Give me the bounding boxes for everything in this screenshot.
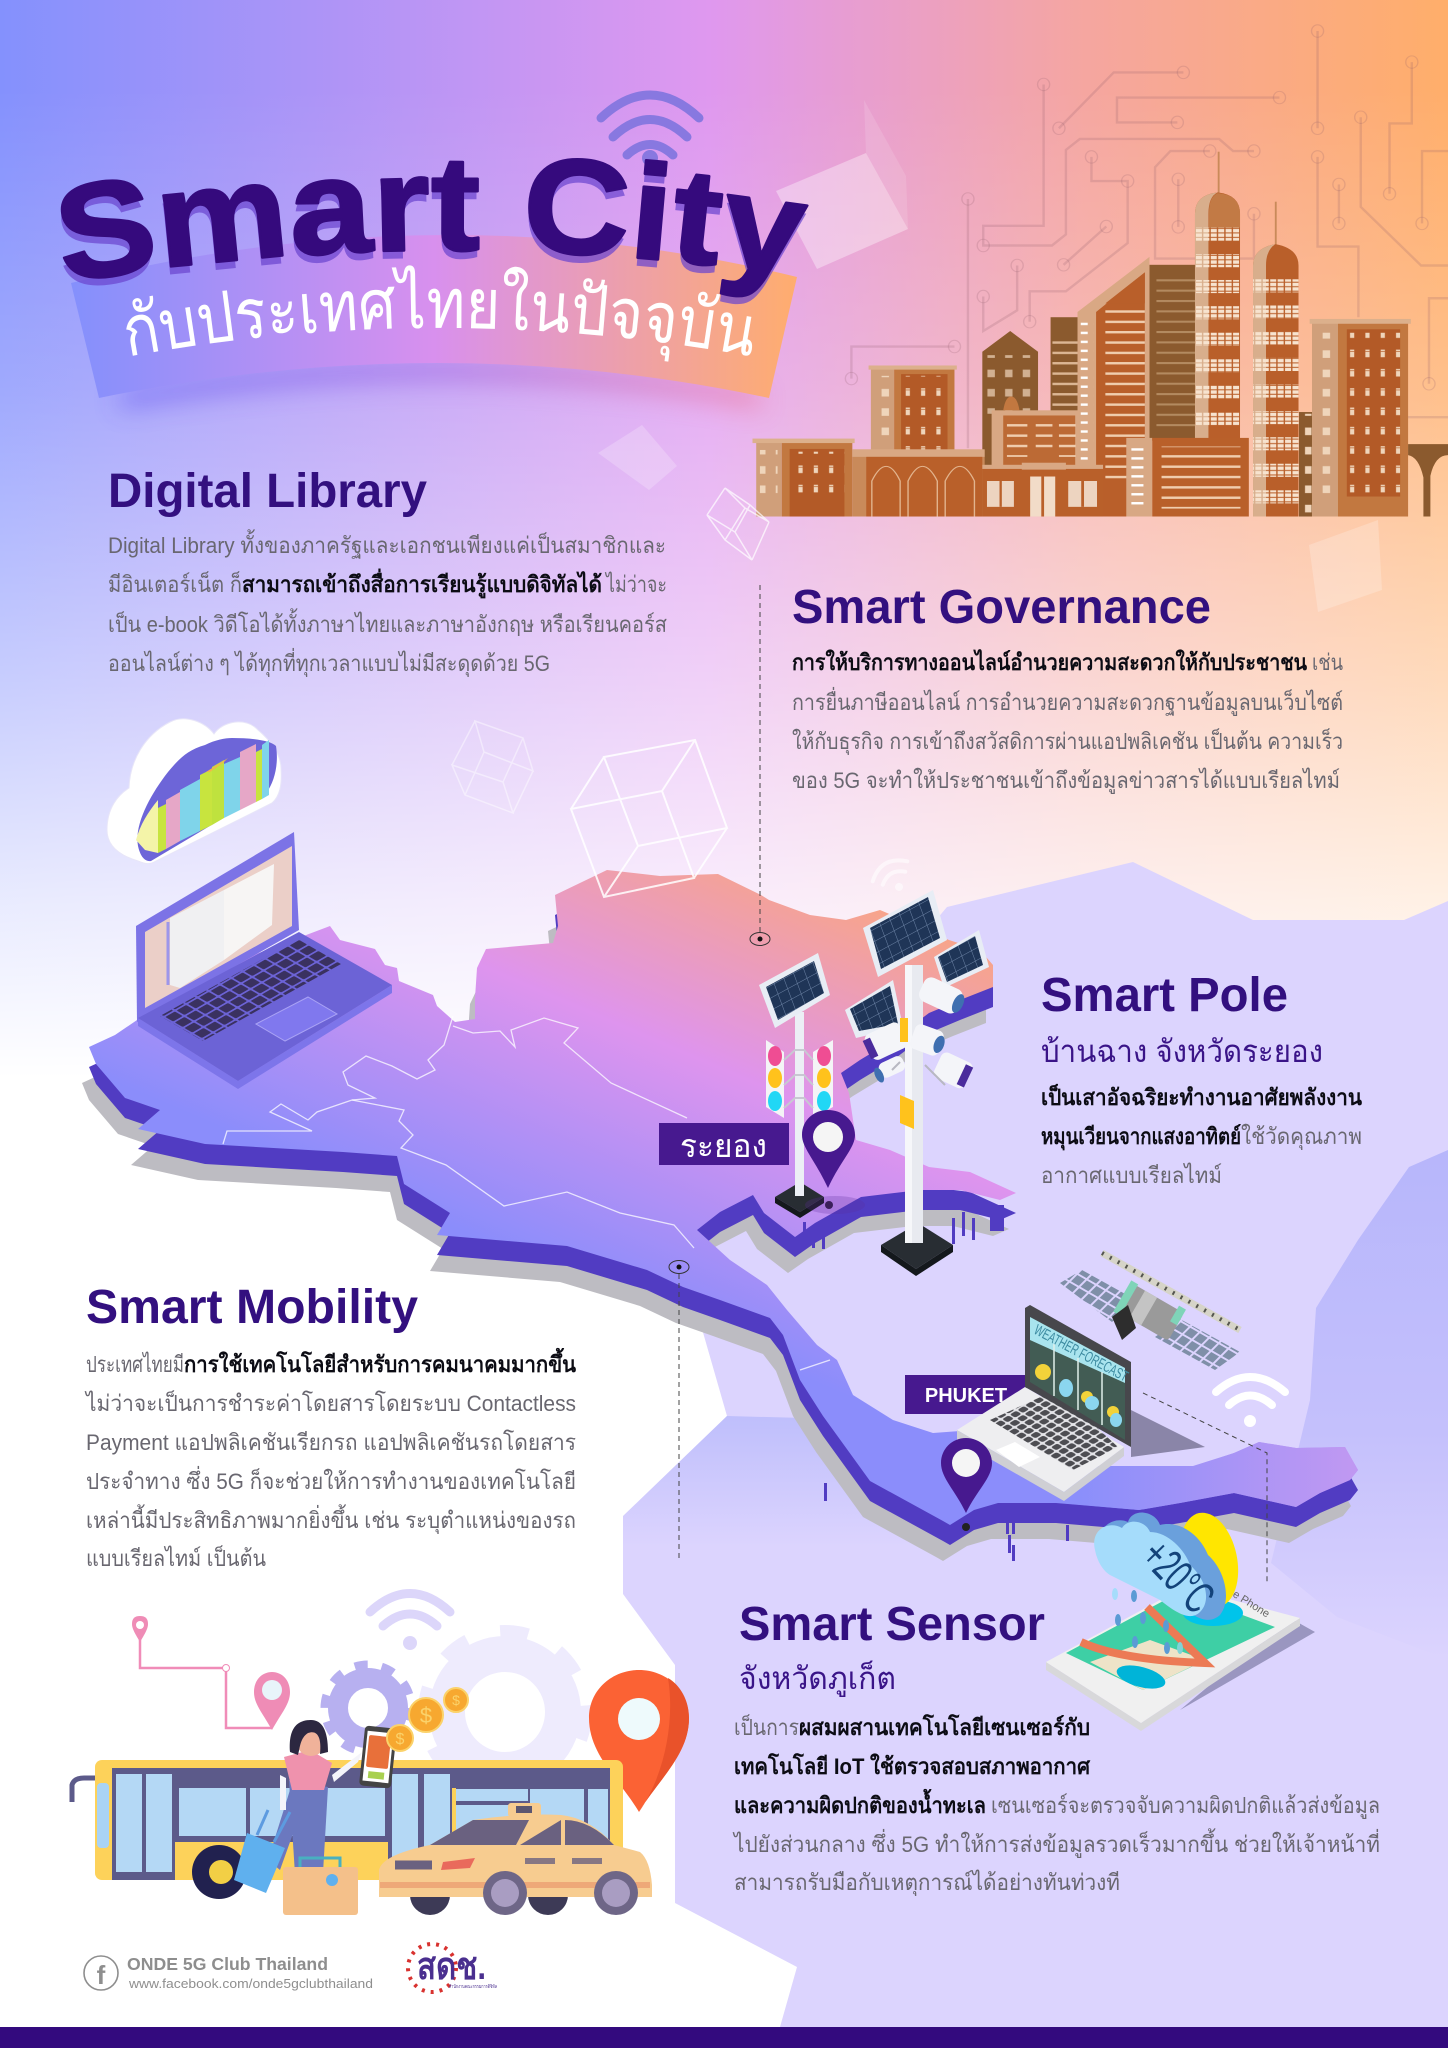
phone with map: e Phone — [1230, 1588, 1272, 1620]
footer: facebook: www.facebook.com/onde5gclubthailand — [128, 1976, 373, 1991]
footer: facebook — [84, 1954, 373, 1991]
icon: cloud with books — [107, 719, 281, 864]
building: arcade — [852, 449, 985, 517]
route line — [140, 1640, 272, 1728]
solar smart pole right — [845, 890, 989, 1276]
viaduct — [1408, 444, 1448, 517]
dashed leader: mobility — [669, 1260, 689, 1560]
weather laptop: WEATHER FORECAST — [1031, 1322, 1131, 1385]
body: Smart Sensor: เซนเซอร์จะตรวจจับความผิดปกติแล้วส่งข้อมูล — [991, 1792, 1380, 1819]
building: far left — [753, 439, 855, 517]
circuit lines — [845, 25, 1448, 448]
phone and coins: $ — [396, 1731, 405, 1748]
body: Smart Mobility: เหล่านี้มีประสิทธิภาพมากยิ่งขึ้น เช่น ระบุตำแหน่งของรถ — [86, 1504, 576, 1534]
body: Smart Governance: การให้บริการทางออนไลน์อำนวยความสะดวกให้กับประชาชน — [792, 649, 1308, 675]
label: Phuket — [905, 1375, 1027, 1414]
pin: Rayong — [802, 1110, 865, 1214]
wifi pale — [370, 1594, 450, 1650]
building: dark block — [1051, 317, 1078, 414]
solar panel — [759, 953, 830, 1028]
body: Smart Mobility: Payment แอปพลิเคชันเรียกรถ แอปพลิเคชันรถโดยสาร — [86, 1429, 576, 1455]
phone and coins: $ — [452, 1692, 460, 1708]
satellite — [1060, 1253, 1240, 1370]
body: Smart Governance — [792, 649, 1343, 794]
body: Digital Library — [108, 529, 667, 677]
label: Rayong: ระยอง — [680, 1128, 767, 1164]
tower one — [1195, 192, 1240, 440]
body: Digital Library: เป็น e-book วิดีโอได้ทั้งภาษาไทยและภาษาอังกฤษ หรือเรียนคอร์ส — [108, 608, 667, 637]
wifi icon above title — [601, 95, 699, 166]
body: Smart Sensor: ไปยังส่วนกลาง ซึ่ง 5G ทำให้การส่งข้อมูลรวดเร็วมากขึ้น ช่วยให้เจ้าหน้าที่ — [732, 1828, 1380, 1858]
body: Smart Mobility: ไม่ว่าจะเป็นการชำระค่าโดยสารโดยระบบ Contactless — [84, 1389, 576, 1416]
body: Smart Pole: หมุนเวียนจากแสงอาทิตย์ — [1041, 1123, 1241, 1151]
solar panels — [845, 890, 989, 1038]
heading: Smart Sensor: Smart Sensor — [739, 1598, 1045, 1651]
phone and coins: $ — [420, 1703, 432, 1728]
body: Smart Pole: อากาศแบบเรียลไทม์ — [1041, 1162, 1222, 1188]
rain drops — [1112, 1588, 1183, 1654]
dashed leader: governance — [750, 585, 770, 946]
lavender background panel — [623, 862, 1448, 2027]
heading: Digital Library: Digital Library — [108, 465, 427, 518]
body: Smart Governance: ของ 5G จะทำให้ประชาชนเข้าถึงข้อมูลข่าวสารได้แบบเรียลไทม์ — [792, 767, 1340, 794]
province borders — [223, 1016, 830, 1370]
weather laptop — [957, 1305, 1205, 1501]
body: Smart Mobility: แบบเรียลไทม์ เป็นต้น — [86, 1544, 266, 1571]
body: Smart Mobility — [84, 1347, 577, 1571]
body: Smart Governance: ให้กับธุรกิจ การเข้าถึงสวัสดิการผ่านแอปพลิเคชัน เป็นต้น ความเร็ว — [792, 727, 1343, 755]
ribbon banner — [71, 235, 797, 408]
pink pin — [254, 1672, 290, 1730]
icon: wifi white — [1216, 1377, 1285, 1427]
wifi faint over map — [868, 854, 917, 899]
woman with phone — [268, 1720, 362, 1912]
body: Digital Library: ไม่ว่าจะ — [604, 571, 667, 597]
forecast suns — [1035, 1364, 1119, 1418]
orange pin — [589, 1670, 689, 1812]
pin: Phuket — [941, 1438, 992, 1531]
bus — [72, 1760, 623, 1899]
body: Digital Library: มีอินเตอร์เน็ต ก็ — [108, 570, 242, 597]
forecast column dividers — [1054, 1344, 1102, 1425]
footer: facebook: f — [97, 1960, 106, 1990]
subtitle: Ban Chang Rayong: บ้านฉาง จังหวัดระยอง — [1041, 1034, 1323, 1069]
body: Smart Governance: เช่น — [1312, 650, 1343, 675]
weather cloud +20°C — [1094, 1507, 1246, 1654]
wire cubes — [452, 488, 769, 897]
body: Smart Sensor: เป็นการ — [734, 1713, 799, 1740]
building: rear right — [1310, 319, 1411, 517]
forecast clouds — [1059, 1379, 1122, 1427]
mobility illustration — [72, 1594, 689, 1915]
heading: Smart Governance: Smart Governance — [792, 581, 1211, 634]
pole base — [881, 1223, 953, 1276]
traffic signals left — [766, 1040, 784, 1118]
footer: facebook: ONDE 5G Club Thailand — [127, 1954, 328, 1974]
body: Smart Sensor: เทคโนโลยี IoT ใช้ตรวจสอบสภาพอากาศ — [734, 1752, 1091, 1779]
building: low striped — [1126, 438, 1249, 517]
body: Smart Mobility: การใช้เทคโนโลยีสำหรับการคมนาคมมากขึ้น — [184, 1347, 577, 1377]
title: Smart City: Smart City — [61, 175, 806, 304]
footer: ONDE logo: สดช. — [417, 1946, 486, 1988]
city skyline — [753, 152, 1448, 517]
body: Smart Pole — [1041, 1083, 1363, 1188]
building: brown peaked house — [982, 331, 1038, 465]
ribbon subtitle: กับประเทศไทยในปัจจุบัน — [126, 265, 752, 362]
building: small front — [982, 397, 1103, 517]
icon: laptop with book — [136, 832, 392, 1089]
body: Digital Library: ออนไลน์ต่าง ๆ ได้ทุกที่ทุกเวลาแบบไม่มีสะดุดด้วย 5G — [108, 647, 550, 677]
body: Digital Library: สามารถเข้าถึงสื่อการเรียนรู้แบบดิจิทัลได้ — [242, 568, 602, 599]
big gear — [425, 1632, 585, 1792]
dashed leader: sensor — [1143, 1393, 1267, 1583]
body: Smart Sensor: และความผิดปกติของน้ำทะเล — [734, 1788, 986, 1818]
bottom bar — [0, 2027, 1448, 2048]
body: Smart Sensor: ผสมผสานเทคโนโลยีเซนเซอร์กับ — [799, 1713, 1090, 1740]
subtitle: Phuket province: จังหวัดภูเก็ต — [739, 1660, 896, 1697]
books — [158, 740, 269, 853]
body: Smart Mobility: ประจำทาง ซึ่ง 5G ก็จะช่วยให้การทำงานของเทคโนโลยี — [86, 1465, 576, 1494]
label: Phuket: PHUKET — [925, 1385, 1007, 1407]
body: Smart Sensor — [732, 1713, 1380, 1896]
body: Smart Sensor: สามารถรับมือกับเหตุการณ์ได้อย่างทันท่วงที — [734, 1869, 1120, 1896]
phone and coins — [359, 1688, 468, 1789]
heading: Smart Pole: Smart Pole — [1041, 969, 1288, 1022]
body: Digital Library: Digital Library ทั้งของภาครัฐและเอกชนเพียงแค่เป็นสมาชิกและ — [108, 529, 666, 559]
small island bars — [803, 1205, 1069, 1561]
body: Smart Mobility: ประเทศไทยมี — [86, 1351, 184, 1377]
blue suitcase — [234, 1810, 290, 1893]
translucent paper shapes — [598, 100, 1382, 612]
map of Thailand — [82, 870, 1358, 1561]
cameras — [861, 975, 974, 1129]
brown suitcase — [283, 1858, 358, 1915]
solar pole left — [759, 953, 833, 1218]
title: Smart City: Smart City — [60, 158, 809, 298]
tower two — [1253, 244, 1312, 517]
traffic signals right — [813, 1040, 833, 1118]
body: Smart Pole: ใช้วัดคุณภาพ — [1241, 1124, 1362, 1150]
blue tint polygon lower left — [623, 1416, 1000, 1580]
small gear — [325, 1665, 411, 1751]
footer: ONDE logo: สำนักงานคณะกรรมการดิจิทัล — [449, 1983, 497, 1990]
taxi — [379, 1803, 652, 1915]
building: dark slab — [1149, 265, 1196, 441]
blue tint polygon right — [1271, 1150, 1448, 1660]
weather cloud +20°C: +20°C — [1131, 1530, 1224, 1623]
body: Smart Governance: การยื่นภาษีออนไลน์ การอำนวยความสะดวกฐานข้อมูลบนเว็บไซต์ — [792, 686, 1343, 716]
small pin — [132, 1616, 230, 1672]
building: slanted tower — [1078, 257, 1149, 517]
body: Smart Pole: เป็นเสาอัจฉริยะทำงานอาศัยพลังงาน — [1041, 1083, 1363, 1110]
heading: Smart Mobility: Smart Mobility — [86, 1281, 418, 1334]
label: Rayong — [659, 1123, 789, 1165]
open book pages — [168, 864, 274, 988]
phone with map — [1046, 1587, 1315, 1731]
building: left tall — [869, 365, 957, 451]
